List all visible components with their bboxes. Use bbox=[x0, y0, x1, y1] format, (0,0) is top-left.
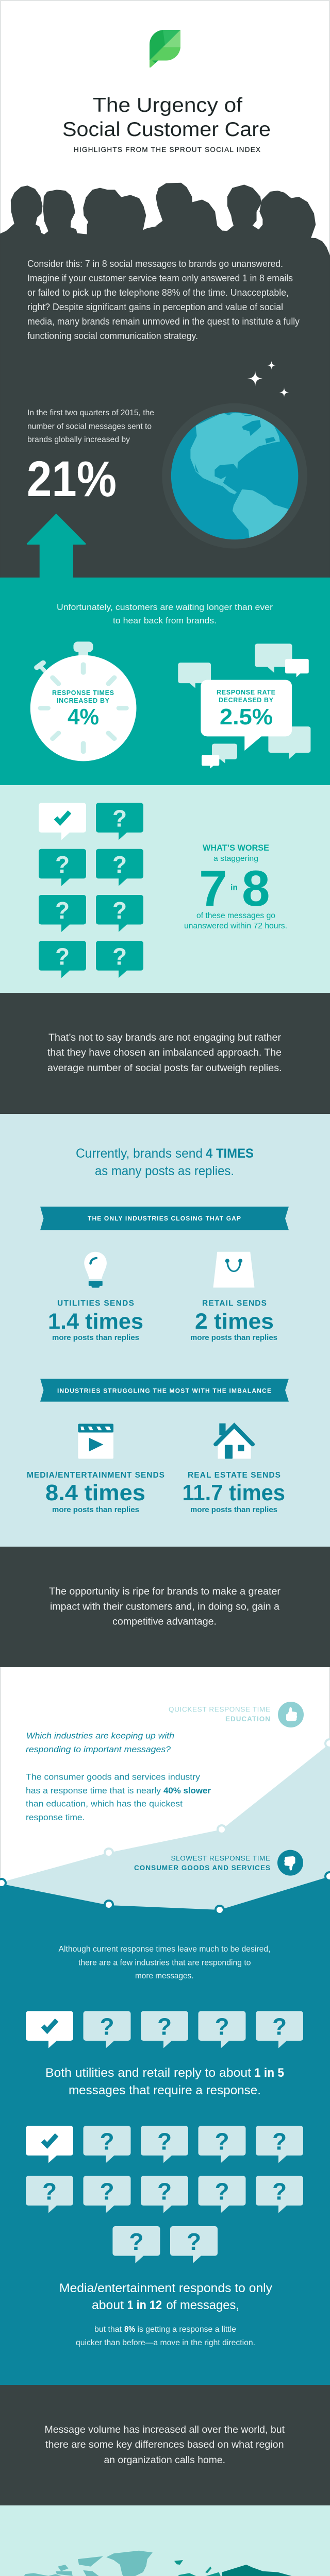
panel: world map bbox=[0, 2505, 330, 2576]
question: responding to important messages? bbox=[26, 1744, 171, 1754]
statement text bbox=[47, 1032, 282, 1074]
subtitle: HIGHLIGHTS FROM THE SPROUT SOCIAL INDEX bbox=[74, 146, 260, 154]
callout: quickest response time: QUICKEST RESPONSE TIME bbox=[169, 1706, 270, 1714]
stat: utilities: more posts than replies bbox=[52, 1333, 139, 1342]
statement: 1 in 12 bbox=[59, 2281, 273, 2312]
statement: 1 in 5 bbox=[45, 2066, 284, 2097]
paragraph: few industries: Although current response times leave much to be desired, bbox=[59, 1945, 270, 1954]
icon: speech bubble cluster bbox=[178, 643, 310, 769]
statement text: impact with their customers and, in doing so, gain a bbox=[50, 1601, 279, 1613]
paragraph: few industries: more messages. bbox=[135, 1972, 194, 1980]
stat: real estate: more posts than replies bbox=[190, 1505, 277, 1514]
note: 8 percent: but that bbox=[94, 2325, 122, 2334]
bubble row: 1 in 5 first row: ? bbox=[272, 2013, 287, 2040]
bubble row: 1 in 5 first row: ? bbox=[100, 2013, 114, 2040]
bubble grid: 1 in 12: ? bbox=[272, 2128, 287, 2155]
note: 8 percent: 8% bbox=[124, 2325, 135, 2334]
icon: globe bbox=[162, 403, 307, 549]
intro stat text: brands globally increased by bbox=[27, 435, 130, 444]
section intro text bbox=[57, 602, 273, 625]
stat: utilities: UTILITIES SENDS bbox=[57, 1299, 134, 1308]
stat: 7 in 8: WHAT’S WORSE bbox=[203, 843, 269, 853]
bubble grid: 1 in 12: ? bbox=[42, 2178, 57, 2205]
panel: imbalanced approach statement bbox=[0, 993, 330, 1114]
stat: media and entertainment bbox=[27, 1471, 164, 1514]
bubble row: 1 in 5 first row bbox=[26, 2011, 303, 2048]
callout: quickest response time bbox=[169, 1702, 304, 1727]
stat: response times: 4% bbox=[68, 704, 99, 730]
panel: response times (teal) bbox=[0, 515, 330, 785]
note: 8 percent: is getting a response a little bbox=[137, 2325, 236, 2334]
heading: Currently, brands send bbox=[76, 1146, 203, 1161]
panel: regional differences statement bbox=[0, 2385, 330, 2505]
stat: response times bbox=[52, 689, 114, 730]
icon: shopping bag bbox=[213, 1252, 254, 1287]
stat: 7 in 8: a staggering bbox=[213, 854, 258, 863]
title: The Urgency of bbox=[93, 94, 242, 116]
stat: 7 in 8 bbox=[184, 843, 287, 930]
intro paragraph: right? Despite significant gains in perception and value of social bbox=[27, 302, 283, 312]
paragraph: consumer goods: The consumer goods and services industry bbox=[26, 1772, 201, 1782]
intro stat text: number of social messages sent to bbox=[27, 422, 152, 431]
bubble grid: 1 in 12: ? bbox=[100, 2128, 114, 2155]
ribbon: industries struggling bbox=[40, 1379, 289, 1402]
question bbox=[26, 1731, 174, 1754]
icon: stars bbox=[248, 361, 289, 398]
bubble grid: 1 answered of 8: ? bbox=[112, 897, 127, 924]
paragraph: consumer goods: than education, which has the quickest bbox=[26, 1799, 183, 1808]
header: logo and title bbox=[62, 30, 271, 154]
question: Which industries are keeping up with bbox=[26, 1731, 174, 1740]
heading bbox=[76, 1146, 254, 1178]
bubble grid: 1 in 12: ? bbox=[272, 2178, 287, 2205]
panel: opportunity statement bbox=[0, 1547, 330, 1667]
bubble row: 1 in 5 first row: ? bbox=[157, 2013, 172, 2040]
bubble grid: 1 in 12: ? bbox=[214, 2178, 229, 2205]
paragraph: consumer goods: response time. bbox=[26, 1812, 85, 1822]
intro stat text bbox=[27, 409, 154, 444]
intro paragraph: Imagine if your customer service team only answered 1 in 8 emails bbox=[27, 273, 293, 283]
icon: up arrow bbox=[27, 515, 85, 579]
stat: utilities: 1.4 times bbox=[48, 1309, 143, 1334]
stat: 7 in 8: of these messages go bbox=[196, 911, 275, 920]
stat: 7 in 8: unanswered within 72 hours. bbox=[184, 922, 287, 930]
intro paragraph bbox=[27, 259, 300, 341]
stat: response times: INCREASED BY bbox=[57, 697, 110, 704]
stat: retail: 2 times bbox=[195, 1309, 274, 1334]
statement: 1 in 12: Media/entertainment responds to only bbox=[59, 2281, 273, 2295]
paragraph: consumer goods bbox=[26, 1772, 211, 1822]
intro paragraph: functioning social communication strategy. bbox=[27, 331, 198, 341]
callout: slowest response time: CONSUMER GOODS AND SERVICES bbox=[134, 1864, 270, 1872]
stat: real estate: 11.7 times bbox=[183, 1480, 285, 1505]
panel: response time by industry chart bbox=[0, 1702, 330, 2385]
statement text bbox=[44, 2425, 285, 2466]
ribbon: industries struggling: INDUSTRIES STRUGGLING THE MOST WITH THE IMBALANCE bbox=[57, 1387, 271, 1394]
statement: 1 in 12: of messages, bbox=[166, 2298, 239, 2312]
bubble grid: 1 in 12: ? bbox=[157, 2128, 172, 2155]
icon: video clapper bbox=[78, 1423, 113, 1459]
note: 8 percent: quicker than before—a move in the right direction. bbox=[76, 2338, 255, 2347]
title bbox=[62, 94, 271, 141]
stat: response times: RESPONSE TIMES bbox=[52, 689, 114, 697]
bubble grid: 1 in 12: ? bbox=[214, 2128, 229, 2155]
stat: response rate: 2.5% bbox=[220, 704, 273, 730]
bubble grid: 1 answered of 8: ? bbox=[112, 851, 127, 878]
stat: retail: RETAIL SENDS bbox=[202, 1299, 267, 1308]
bubble grid: 1 answered of 8: ? bbox=[55, 897, 70, 924]
icon: Sprout Social leaf logo bbox=[150, 30, 180, 67]
stat: real estate bbox=[183, 1471, 285, 1514]
stat: response rate: DECREASED BY bbox=[219, 697, 274, 704]
statement text: an organization calls home. bbox=[104, 2455, 225, 2466]
bubble row: 1 in 5 first row: ? bbox=[214, 2013, 229, 2040]
bubble grid: 1 in 12: ? bbox=[157, 2178, 172, 2205]
panel: intro on crowd silhouette bbox=[0, 183, 330, 579]
bubble grid: 1 answered of 8 bbox=[39, 803, 143, 978]
heading: as many posts as replies. bbox=[95, 1164, 234, 1178]
statement text: competitive advantage. bbox=[112, 1617, 217, 1627]
bubble grid: 1 in 12: ? bbox=[129, 2228, 143, 2255]
bubble grid: 1 in 12: ? bbox=[100, 2178, 114, 2205]
stat: retail bbox=[190, 1299, 277, 1342]
stat: media and entertainment: MEDIA/ENTERTAINMENT SENDS bbox=[27, 1471, 164, 1480]
note: 8 percent bbox=[76, 2325, 255, 2347]
callout: slowest response time: SLOWEST RESPONSE TIME bbox=[171, 1855, 270, 1862]
paragraph: consumer goods: has a response time that is nearly bbox=[26, 1786, 161, 1795]
stat: utilities bbox=[48, 1299, 143, 1342]
stat: real estate: REAL ESTATE SENDS bbox=[188, 1471, 280, 1480]
statement: 1 in 5: Both utilities and retail reply to about bbox=[45, 2066, 251, 2080]
bubble grid: 1 answered of 8: ? bbox=[55, 851, 70, 878]
map: world regions bbox=[22, 2551, 308, 2576]
callout: quickest response time: EDUCATION bbox=[225, 1715, 270, 1723]
heading: 4 TIMES bbox=[206, 1146, 254, 1161]
icon: light bulb bbox=[84, 1252, 107, 1288]
stat: retail: more posts than replies bbox=[190, 1333, 277, 1342]
statement text: That’s not to say brands are not engaging but rather bbox=[48, 1032, 282, 1043]
section intro text: to hear back from brands. bbox=[113, 616, 217, 625]
paragraph: few industries bbox=[59, 1945, 270, 1980]
icon: stopwatch bbox=[30, 641, 136, 761]
intro paragraph: media, many brands remain unmoved in the quest to institute a fully bbox=[27, 316, 300, 327]
statement: 1 in 12: 1 in 12 bbox=[127, 2298, 162, 2312]
section intro text: Unfortunately, customers are waiting longer than ever bbox=[57, 602, 273, 612]
bubble grid: 1 in 12 bbox=[26, 2126, 303, 2263]
intro stat text: In the first two quarters of 2015, the bbox=[27, 409, 154, 417]
paragraph: consumer goods: 40% slower bbox=[163, 1786, 211, 1795]
statement: 1 in 5: messages that require a response. bbox=[69, 2083, 261, 2097]
statement text: average number of social posts far outweigh replies. bbox=[47, 1063, 282, 1074]
stat: 7 in 8: in bbox=[230, 883, 238, 892]
statement text: that they have chosen an imbalanced approach. The bbox=[47, 1047, 282, 1058]
ribbon: industries closing the gap: THE ONLY INDUSTRIES CLOSING THAT GAP bbox=[88, 1215, 241, 1222]
statement text bbox=[49, 1586, 281, 1627]
stat: 7 in 8: 7 bbox=[199, 860, 227, 917]
paragraph: few industries: there are a few industries that are responding to bbox=[78, 1958, 251, 1967]
stat: response rate bbox=[217, 689, 275, 730]
chart: quickest to slowest area bbox=[0, 1739, 330, 2385]
icon: house bbox=[216, 1423, 253, 1459]
title: Social Customer Care bbox=[62, 118, 271, 141]
crowd silhouette bbox=[0, 183, 330, 579]
panel: posts versus replies by industry bbox=[0, 1114, 330, 1547]
stat: response rate: RESPONSE RATE bbox=[217, 689, 275, 696]
statement text: Message volume has increased all over the world, but bbox=[44, 2425, 285, 2435]
stat: media and entertainment: 8.4 times bbox=[45, 1480, 145, 1505]
statement text: The opportunity is ripe for brands to make a greater bbox=[49, 1586, 281, 1597]
bubble grid: 1 answered of 8: ? bbox=[55, 943, 70, 970]
statement: 1 in 12: about bbox=[92, 2298, 124, 2312]
intro paragraph: or failed to pick up the telephone 88% of the time. Unacceptable, bbox=[27, 287, 289, 298]
statement: 1 in 5: 1 in 5 bbox=[254, 2066, 284, 2080]
statement text: there are some key differences based on what region bbox=[45, 2439, 284, 2450]
bubble grid: 1 answered of 8: ? bbox=[112, 805, 127, 832]
stat: 7 in 8: 8 bbox=[242, 860, 270, 917]
ribbon: industries closing the gap bbox=[40, 1207, 289, 1230]
callout: slowest response time bbox=[134, 1850, 303, 1876]
stat: media and entertainment: more posts than replies bbox=[52, 1505, 139, 1514]
panel: 7 in 8 unanswered bbox=[0, 785, 330, 993]
big number 21%: 21% bbox=[27, 451, 117, 507]
intro paragraph: Consider this: 7 in 8 social messages to brands go unanswered. bbox=[27, 259, 283, 269]
bubble grid: 1 in 12: ? bbox=[187, 2228, 201, 2255]
bubble grid: 1 answered of 8: ? bbox=[112, 943, 127, 970]
